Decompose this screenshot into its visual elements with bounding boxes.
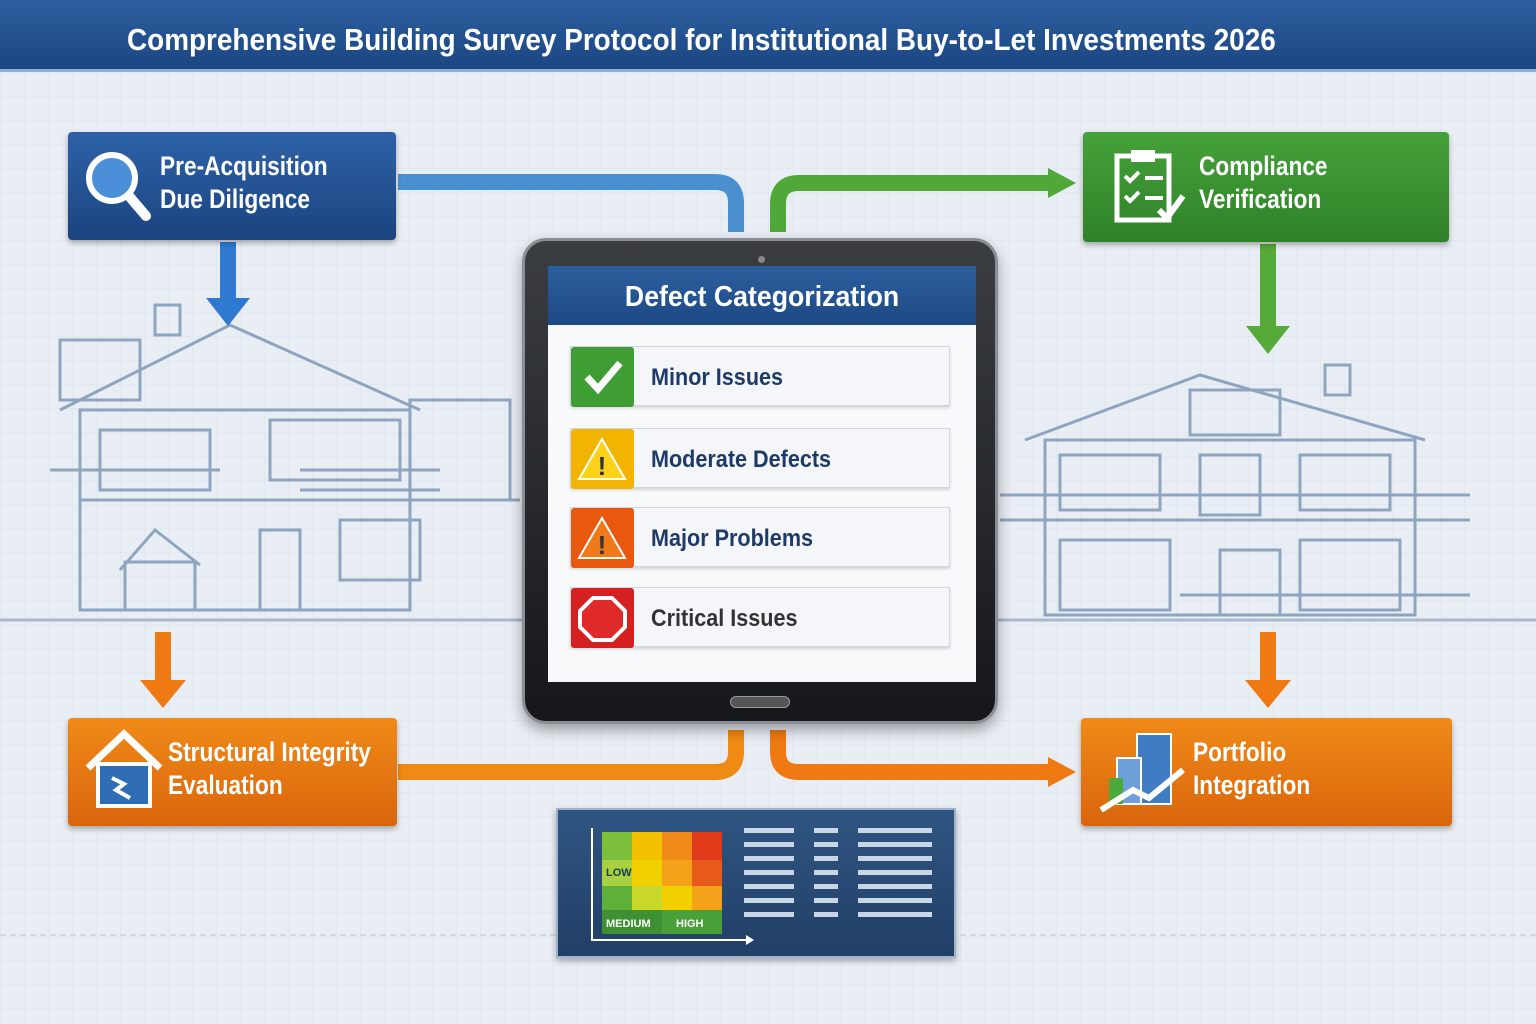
icon: clipboard	[1114, 150, 1186, 223]
screen header	[548, 266, 976, 325]
risk matrix: LOW	[606, 867, 632, 879]
screen	[548, 266, 976, 682]
icon: house crack	[86, 729, 162, 808]
box: structural	[68, 718, 397, 826]
box: compliance	[1083, 132, 1449, 242]
row: moderate	[570, 428, 950, 488]
screen header: Defect Categorization	[625, 281, 899, 313]
icon: buildings chart	[1100, 733, 1185, 812]
house sketch right	[1000, 364, 1470, 616]
box: portfolio: Integration	[1193, 770, 1310, 800]
bottom chart panel	[556, 808, 956, 958]
row: critical	[570, 587, 950, 647]
row: minor: Minor Issues	[651, 364, 783, 391]
risk matrix: HIGH	[676, 918, 704, 930]
row: major: !	[598, 530, 606, 560]
row: minor	[570, 346, 950, 406]
house sketch left	[50, 304, 520, 612]
risk matrix: MEDIUM	[606, 918, 651, 930]
title bar: Comprehensive Building Survey Protocol for Institutional Buy-to-Let Investments 2026	[127, 22, 1276, 57]
box: pre-acquisition: Due Diligence	[160, 184, 310, 214]
title bar	[0, 0, 1536, 72]
box: compliance: Compliance	[1199, 151, 1328, 181]
tablet	[522, 238, 998, 724]
row: moderate: !	[598, 451, 606, 481]
box: structural: Structural Integrity	[168, 737, 371, 767]
box: portfolio	[1081, 718, 1452, 826]
box: structural: Evaluation	[168, 770, 283, 800]
row: moderate: Moderate Defects	[651, 446, 831, 473]
risk matrix	[591, 828, 932, 945]
box: compliance: Verification	[1199, 184, 1321, 214]
box: pre-acquisition: Pre-Acquisition	[160, 151, 328, 181]
row: critical: Critical Issues	[651, 605, 797, 632]
box: pre-acquisition	[68, 132, 396, 240]
row: major: Major Problems	[651, 525, 813, 552]
row: major	[570, 507, 950, 567]
icon: magnifier	[86, 152, 151, 221]
box: portfolio: Portfolio	[1193, 737, 1286, 767]
